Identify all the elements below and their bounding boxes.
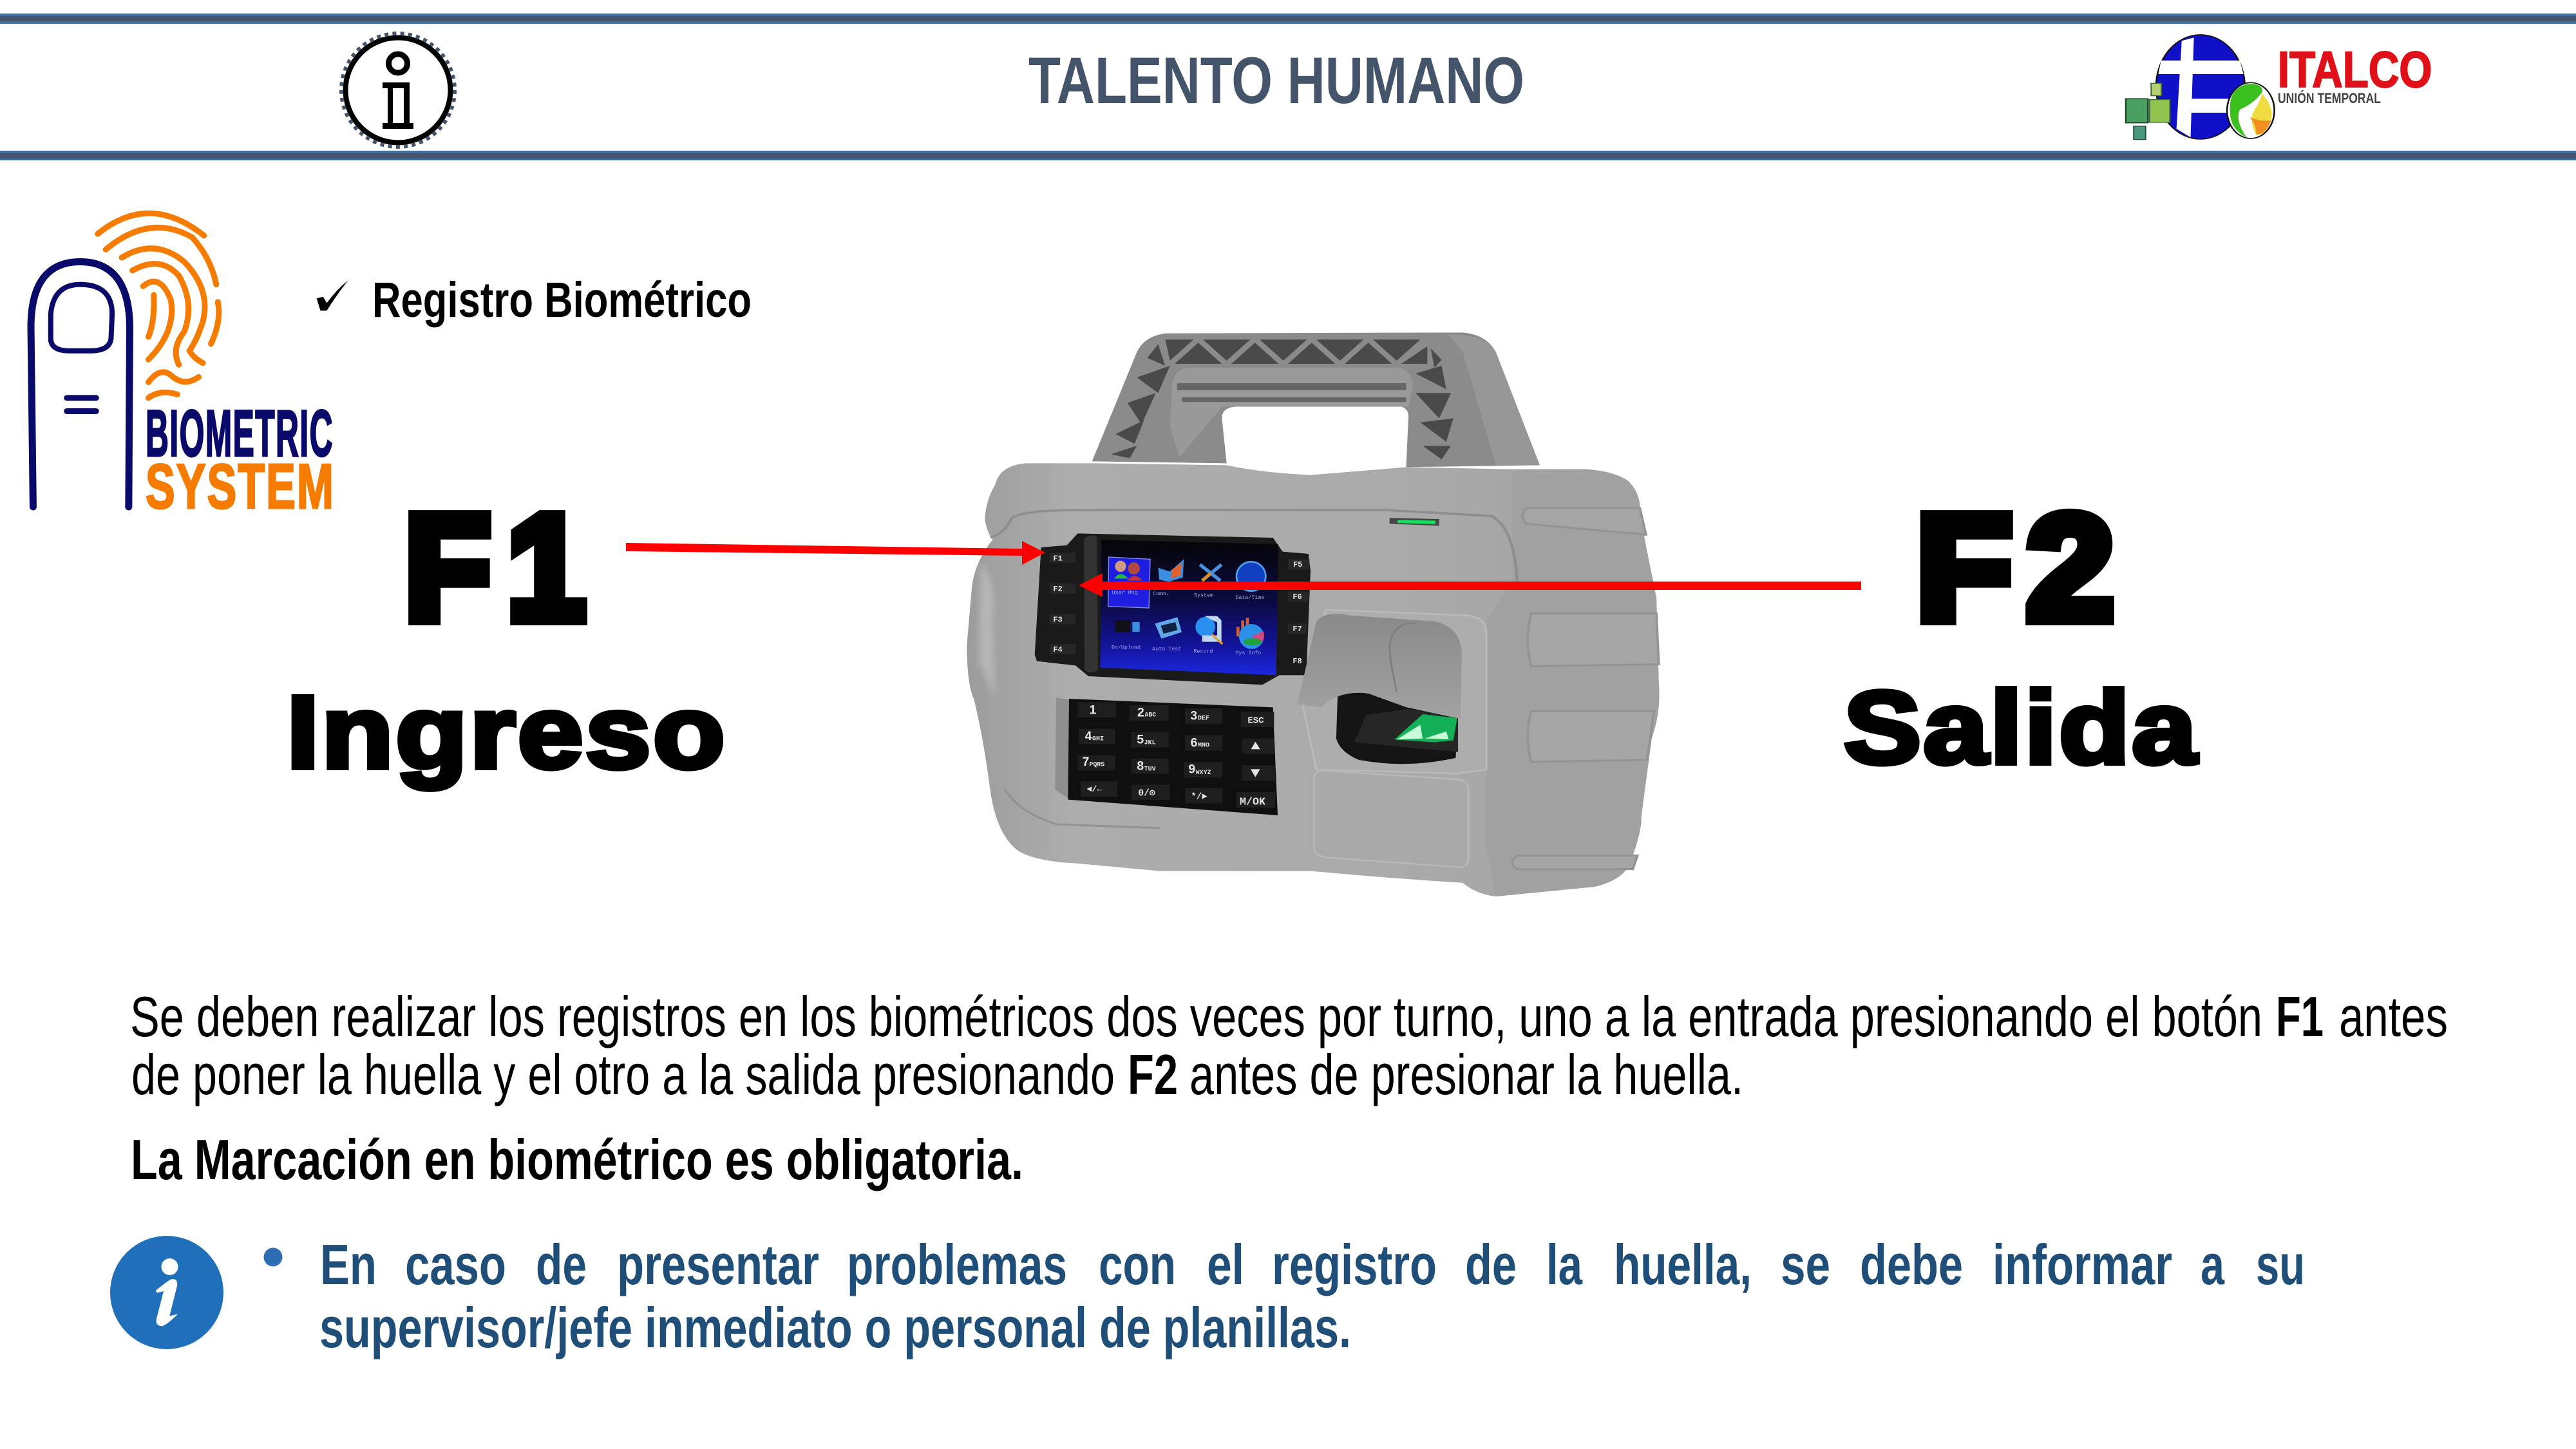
- header band: [0, 14, 2576, 160]
- screen bezel: F6: [1293, 592, 1302, 601]
- title: TALENTO HUMANO: [1028, 44, 1524, 117]
- keypad: 1: [1090, 703, 1097, 717]
- paragraph line 1: F1: [2276, 985, 2324, 1048]
- keypad: */►: [1191, 792, 1208, 802]
- keypad: 3: [1190, 709, 1197, 723]
- keypad: PQRS: [1089, 761, 1104, 768]
- keypad: 9: [1188, 763, 1195, 777]
- notice line 1: su: [2256, 1233, 2305, 1296]
- screen bezel: F3: [1053, 615, 1063, 624]
- menu labels: System: [1194, 592, 1213, 599]
- keypad: 0/⊙: [1138, 789, 1155, 799]
- keypad: 5: [1137, 733, 1144, 746]
- label: F2 Salida: F2: [1917, 485, 2128, 651]
- keypad: GHI: [1092, 735, 1104, 742]
- menu labels: Auto Test: [1152, 646, 1181, 652]
- status LED: [1390, 518, 1439, 526]
- arrow: F1 to button: [626, 541, 1045, 565]
- menu labels: Record: [1193, 648, 1213, 654]
- logo: ITALCO: ITALCO: [2278, 41, 2432, 98]
- notice line 1: presentar: [617, 1233, 819, 1296]
- logo wordmark: [146, 397, 335, 522]
- battery door: [1314, 771, 1468, 867]
- screen bezel: F1: [1053, 554, 1063, 564]
- keypad: JKL: [1144, 739, 1156, 746]
- menu icons: [1114, 559, 1265, 649]
- screen bezel: F5: [1293, 560, 1302, 569]
- heading: registro biometrico: Registro Biométrico: [372, 272, 752, 328]
- notice line 1: [320, 1233, 2305, 1296]
- paragraph line 2: de poner la huella y el otro a la salida presionando: [131, 1043, 1115, 1106]
- mandatory statement: La Marcación en biométrico es obligatoria.: [131, 1128, 1023, 1191]
- icon: information badge: [341, 33, 455, 147]
- notice line 1: con: [1099, 1233, 1176, 1296]
- label: F1 Ingreso: F1: [405, 484, 602, 650]
- screen bezel: F4: [1053, 645, 1063, 654]
- fingerprint ridges: [98, 213, 219, 398]
- notice line 1: problemas: [847, 1233, 1067, 1296]
- keypad: MNO: [1198, 742, 1209, 749]
- top rule: [0, 14, 2576, 24]
- text: BIOMETRIC: [146, 397, 334, 470]
- notice line 1: caso: [405, 1233, 506, 1296]
- menu labels: Dn/Upload: [1112, 644, 1141, 650]
- notice line 1: se: [1781, 1233, 1830, 1296]
- screen bezel: F2: [1053, 585, 1063, 594]
- menu labels: Sys Info: [1235, 650, 1261, 656]
- keypad: 2: [1137, 706, 1144, 719]
- keypad: ◄/←: [1086, 785, 1102, 795]
- notice line 1: el: [1207, 1233, 1244, 1296]
- keypad: 8: [1137, 760, 1144, 773]
- screen bezel: [1035, 533, 1311, 685]
- screen bezel: F7: [1293, 625, 1302, 634]
- keypad: ESC: [1247, 715, 1264, 726]
- logo wordmark: SYSTEM: [146, 451, 335, 522]
- device body: [967, 463, 1660, 896]
- logo: ITALCO: [2126, 35, 2432, 140]
- notice line 1: huella,: [1614, 1233, 1752, 1296]
- paragraph line 2: antes de presionar la huella.: [1189, 1043, 1743, 1106]
- notice line 1: la: [1546, 1233, 1583, 1296]
- side ridges: [1512, 508, 1659, 869]
- notice line 1: registro: [1272, 1233, 1437, 1296]
- notice line 1: a: [2201, 1233, 2225, 1296]
- arrow: F2 to button: [1079, 573, 1861, 597]
- device handle: [1092, 332, 1540, 467]
- fingerprint reader: [1298, 610, 1486, 773]
- keypad: 6: [1191, 736, 1198, 750]
- notice line 1: informar: [1993, 1233, 2172, 1296]
- callout: supervisor notice: [110, 1233, 2305, 1359]
- notice line 1: de: [1465, 1233, 1517, 1296]
- screen menu: [1100, 540, 1278, 675]
- menu labels: [1112, 590, 1264, 656]
- notice line 1: En: [320, 1233, 377, 1296]
- menu labels: Date/Time: [1235, 594, 1264, 601]
- keypad: TUV: [1144, 765, 1156, 772]
- finger outline: [31, 261, 130, 507]
- keypad: 7: [1083, 755, 1089, 769]
- screen bezel: F8: [1293, 657, 1302, 666]
- paragraph line 1: antes: [2339, 985, 2448, 1048]
- label: F1 Ingreso: [287, 484, 727, 790]
- bullet: [264, 1248, 282, 1266]
- biometric device photo: [967, 332, 1660, 896]
- icon: check mark: [317, 280, 348, 310]
- icon: info circle: [110, 1236, 223, 1349]
- keypad: ABC: [1144, 712, 1156, 719]
- keypad: 4: [1085, 730, 1092, 743]
- logo: biometric system: [31, 213, 335, 522]
- paragraph line 2: F2: [1128, 1043, 1178, 1106]
- notice line 1: de: [536, 1233, 587, 1296]
- logo: ITALCO: UNIÓN TEMPORAL: [2278, 90, 2381, 106]
- menu labels: Comm.: [1153, 591, 1169, 597]
- label: F1 Ingreso: Ingreso: [287, 674, 727, 790]
- label: F2 Salida: Salida: [1844, 670, 2199, 785]
- label: F2 Salida: [1844, 485, 2199, 785]
- body paragraph: [130, 985, 2448, 1191]
- notice line 2: supervisor/jefe inmediato o personal de planillas.: [319, 1296, 1351, 1359]
- keypad: DEF: [1198, 714, 1209, 721]
- keypad: [1055, 697, 1278, 815]
- notice line 1: debe: [1860, 1233, 1963, 1296]
- keypad: M/OK: [1240, 797, 1265, 809]
- keypad: WXYZ: [1196, 769, 1211, 776]
- menu labels: User Mng: [1112, 590, 1138, 596]
- bottom rule: [0, 151, 2576, 160]
